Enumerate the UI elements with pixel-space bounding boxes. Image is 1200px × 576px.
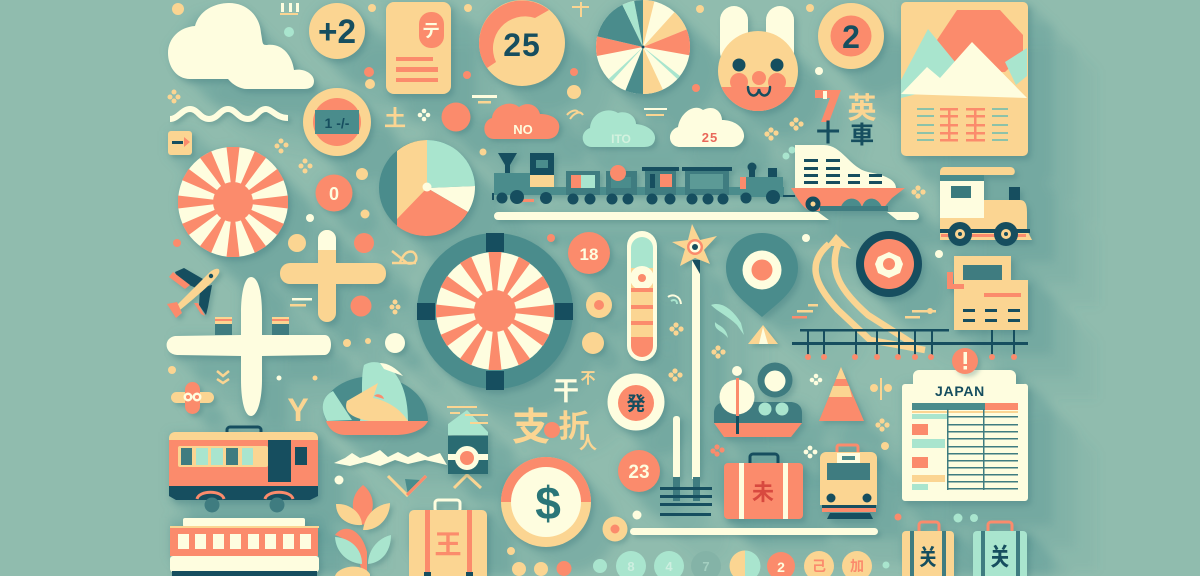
small dashes and dots under cross [168, 296, 405, 380]
pie chart [379, 140, 475, 236]
icon: cross sparkle [572, 2, 589, 17]
loco wheels [948, 222, 1018, 246]
cloud: large cream [168, 3, 314, 89]
red train [169, 427, 318, 500]
kanji cluster center: 不 [580, 370, 596, 387]
coral badge 0 [316, 174, 352, 212]
cloud: 25 [670, 108, 744, 147]
display badge [303, 88, 371, 156]
kanji badge: 発 [626, 393, 646, 415]
bridge rails [792, 329, 1028, 360]
airplane small [167, 268, 219, 318]
small dash lines [472, 95, 497, 104]
dots by rabbit [480, 4, 823, 156]
badge 2 [818, 3, 884, 69]
squiggle icons [567, 109, 667, 119]
big wheel [417, 233, 573, 390]
numbered dots row: 4 [665, 559, 673, 574]
coral badge 0: 0 [329, 184, 339, 204]
red train wheels [197, 492, 293, 512]
dollar badge: $ [535, 477, 561, 529]
chevron arrow [334, 475, 481, 495]
small dashes by arrow [792, 304, 936, 318]
plant leaves [335, 485, 391, 576]
flower icons by kanji [764, 117, 926, 199]
number badge +2 [309, 3, 365, 59]
rail bar [494, 212, 919, 220]
cloud: NO [484, 104, 559, 139]
badge 25: 25 [503, 27, 541, 63]
badge 25 [479, 0, 565, 86]
small flower icons left [168, 90, 312, 174]
house badge [448, 410, 488, 474]
chevrons [217, 371, 229, 383]
peach suitcase: 王 [434, 530, 462, 560]
badge 23 [618, 450, 660, 492]
numbered dots row: 己 [812, 558, 826, 574]
badge 18: 18 [580, 245, 598, 264]
tent [748, 325, 778, 344]
pole base lines [660, 477, 712, 516]
numbered dots row: 8 [627, 559, 635, 574]
rabbit face [716, 6, 800, 113]
ticket card [386, 2, 451, 94]
letter Y: Y [287, 392, 309, 428]
coral suitcase [724, 454, 803, 519]
cloud: ITO: ITO [611, 132, 631, 146]
ring and dots [547, 234, 612, 354]
wavy jagged strip [334, 450, 447, 466]
coral dot with clover [418, 102, 470, 132]
kanji cluster: seven and characters: 車 [850, 122, 874, 149]
dollar badge [501, 457, 591, 547]
swirl icon [392, 251, 416, 264]
pie chart: multicolor [596, 0, 690, 94]
peach cross [280, 230, 386, 322]
decorative dots top left [172, 3, 472, 89]
kanji cluster center: 人 [579, 433, 597, 453]
icon: small sign left [168, 131, 192, 155]
bullet ship [791, 145, 905, 212]
kanji cluster: seven and characters [815, 90, 877, 149]
train white-coral [170, 518, 319, 576]
train set [492, 153, 795, 202]
train front [820, 445, 877, 519]
numbered dots row [593, 550, 890, 576]
coral clover [710, 444, 725, 457]
poles [673, 260, 700, 479]
numbered dots row: 7 [702, 559, 710, 574]
numbered dots row: 加 [850, 558, 864, 574]
train loco right [940, 167, 1032, 240]
fish icons [711, 304, 744, 338]
peach suitcase [409, 500, 487, 576]
suitcase peach bottom right: 关 [917, 545, 939, 570]
pin marker [726, 233, 798, 317]
plane cross big [167, 277, 331, 416]
alert badge [952, 348, 978, 374]
JAPAN schedule card: JAPAN [935, 383, 985, 399]
small plane icon [171, 382, 214, 414]
cloud: 25: 25 [702, 130, 718, 145]
kanji cluster center: 支 [512, 407, 550, 449]
flowers center [668, 322, 726, 382]
kanji badge [608, 374, 664, 430]
badge 2: 2 [842, 19, 860, 55]
dots by target [802, 234, 943, 258]
kanji cluster center [512, 370, 597, 453]
route line with node [602, 516, 878, 542]
cloud: NO: NO [513, 122, 533, 137]
kanji cluster center: 干 [553, 376, 579, 406]
number badge +2: +2 [318, 13, 356, 51]
icon: small kanji bars top [280, 3, 299, 15]
poster: mountain and sun [901, 2, 1028, 156]
dots middle left [173, 168, 374, 253]
suitcase peach bottom right [902, 522, 954, 576]
clovers right [804, 374, 892, 458]
train wheels [496, 190, 780, 204]
kanji earth: 土 [384, 106, 406, 131]
star with ring [672, 224, 717, 266]
cloud: ITO [583, 110, 655, 147]
kanji cluster: seven and characters: 十 [816, 120, 840, 147]
small kanji over house [447, 406, 488, 424]
arrow curved [816, 234, 925, 350]
display badge: 1 -/- [325, 115, 350, 131]
boat with circles [714, 362, 802, 437]
badge 23: 23 [628, 462, 650, 483]
capsule thermometer [627, 231, 657, 361]
coral suitcase: 未 [752, 480, 774, 505]
squiggle center [668, 295, 681, 304]
target disc [856, 231, 922, 297]
suitcase mint bottom right [973, 522, 1027, 576]
ticket card: テ [422, 21, 440, 41]
badge 18 [568, 232, 610, 274]
wave ribbon [170, 109, 288, 119]
kanji cluster: seven and characters: 英 [847, 92, 877, 125]
kanji cluster center: 折 [558, 409, 590, 444]
bottom dots [507, 510, 978, 576]
building card [947, 256, 1028, 330]
JAPAN schedule card [902, 370, 1028, 501]
numbered dots row: 2 [777, 559, 785, 575]
smoke puffs [782, 146, 796, 160]
suitcase mint bottom right: 关 [988, 544, 1012, 571]
engines on plane [215, 317, 289, 335]
sunburst wheel left [178, 147, 288, 257]
cone striped [819, 367, 864, 421]
bowl with rabbit [323, 362, 428, 435]
